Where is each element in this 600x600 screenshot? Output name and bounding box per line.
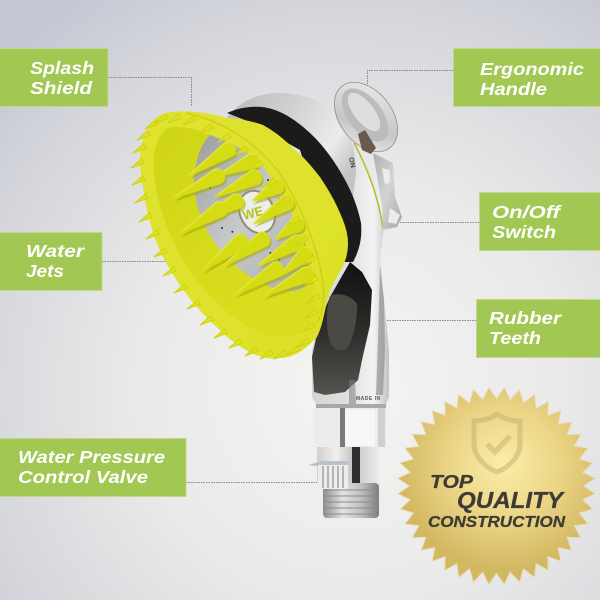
seal text: QUALITY bbox=[457, 487, 566, 513]
dark rubber grip bbox=[312, 262, 372, 395]
handle ring bbox=[322, 70, 410, 164]
black band bbox=[227, 107, 361, 262]
label: on/off switch: On/Off bbox=[492, 202, 563, 222]
ON mark: ON bbox=[347, 157, 356, 169]
yellow side stripe bbox=[354, 143, 383, 228]
switch slot bbox=[358, 130, 376, 154]
label: splash shield: Shield bbox=[30, 78, 92, 98]
label: splash shield bbox=[0, 48, 108, 106]
seal text bbox=[428, 472, 566, 531]
collar bbox=[316, 404, 386, 408]
centre disc: WE bbox=[241, 203, 265, 223]
rim teeth bbox=[131, 114, 320, 359]
seal text: CONSTRUCTION bbox=[428, 514, 565, 531]
on/off switch bbox=[373, 153, 402, 230]
threaded connector bbox=[323, 483, 379, 518]
icon: shield with check bbox=[474, 414, 520, 472]
label: water pressure control valve bbox=[0, 438, 186, 496]
label: rubber teeth: Rubber bbox=[489, 308, 562, 328]
spray plate bbox=[194, 135, 310, 291]
label: splash shield: Splash bbox=[30, 58, 94, 78]
centre disc bbox=[232, 185, 282, 239]
label: rubber teeth: Teeth bbox=[489, 328, 541, 348]
label: ergonomic handle: Ergonomic bbox=[480, 59, 584, 79]
label: water pressure control valve: Control Valve bbox=[18, 467, 148, 487]
seal text: TOP bbox=[430, 472, 474, 492]
grip highlight bbox=[327, 294, 357, 350]
gold starburst bbox=[398, 387, 595, 585]
switch sparkle bbox=[382, 168, 400, 224]
shower head product illustration bbox=[131, 70, 410, 518]
chrome dome head bbox=[227, 93, 356, 205]
label: water jets bbox=[0, 232, 102, 290]
chrome streaks bbox=[349, 265, 385, 404]
label: ergonomic handle bbox=[454, 48, 600, 106]
label: water pressure control valve: Water Pressure bbox=[18, 447, 165, 467]
label: water jets: Jets bbox=[26, 261, 64, 281]
label: rubber teeth bbox=[476, 300, 600, 358]
hex nut bbox=[313, 408, 386, 447]
label: on/off switch: Switch bbox=[492, 222, 556, 242]
chrome handle body bbox=[310, 120, 389, 404]
quality seal badge bbox=[398, 387, 595, 585]
label: ergonomic handle: Handle bbox=[480, 79, 547, 99]
label: water jets: Water bbox=[26, 241, 85, 261]
lower sleeve bbox=[317, 447, 382, 487]
made in mark: MADE IN bbox=[356, 396, 381, 402]
yellow splash shield bbox=[140, 111, 348, 358]
label: on/off switch bbox=[480, 192, 600, 250]
bowl interior bbox=[154, 127, 316, 338]
leader lines bbox=[102, 70, 479, 482]
pressure valve knob bbox=[308, 461, 350, 489]
large rubber cones bbox=[172, 141, 316, 300]
rim crease bbox=[187, 113, 324, 323]
plate holes bbox=[210, 180, 280, 260]
